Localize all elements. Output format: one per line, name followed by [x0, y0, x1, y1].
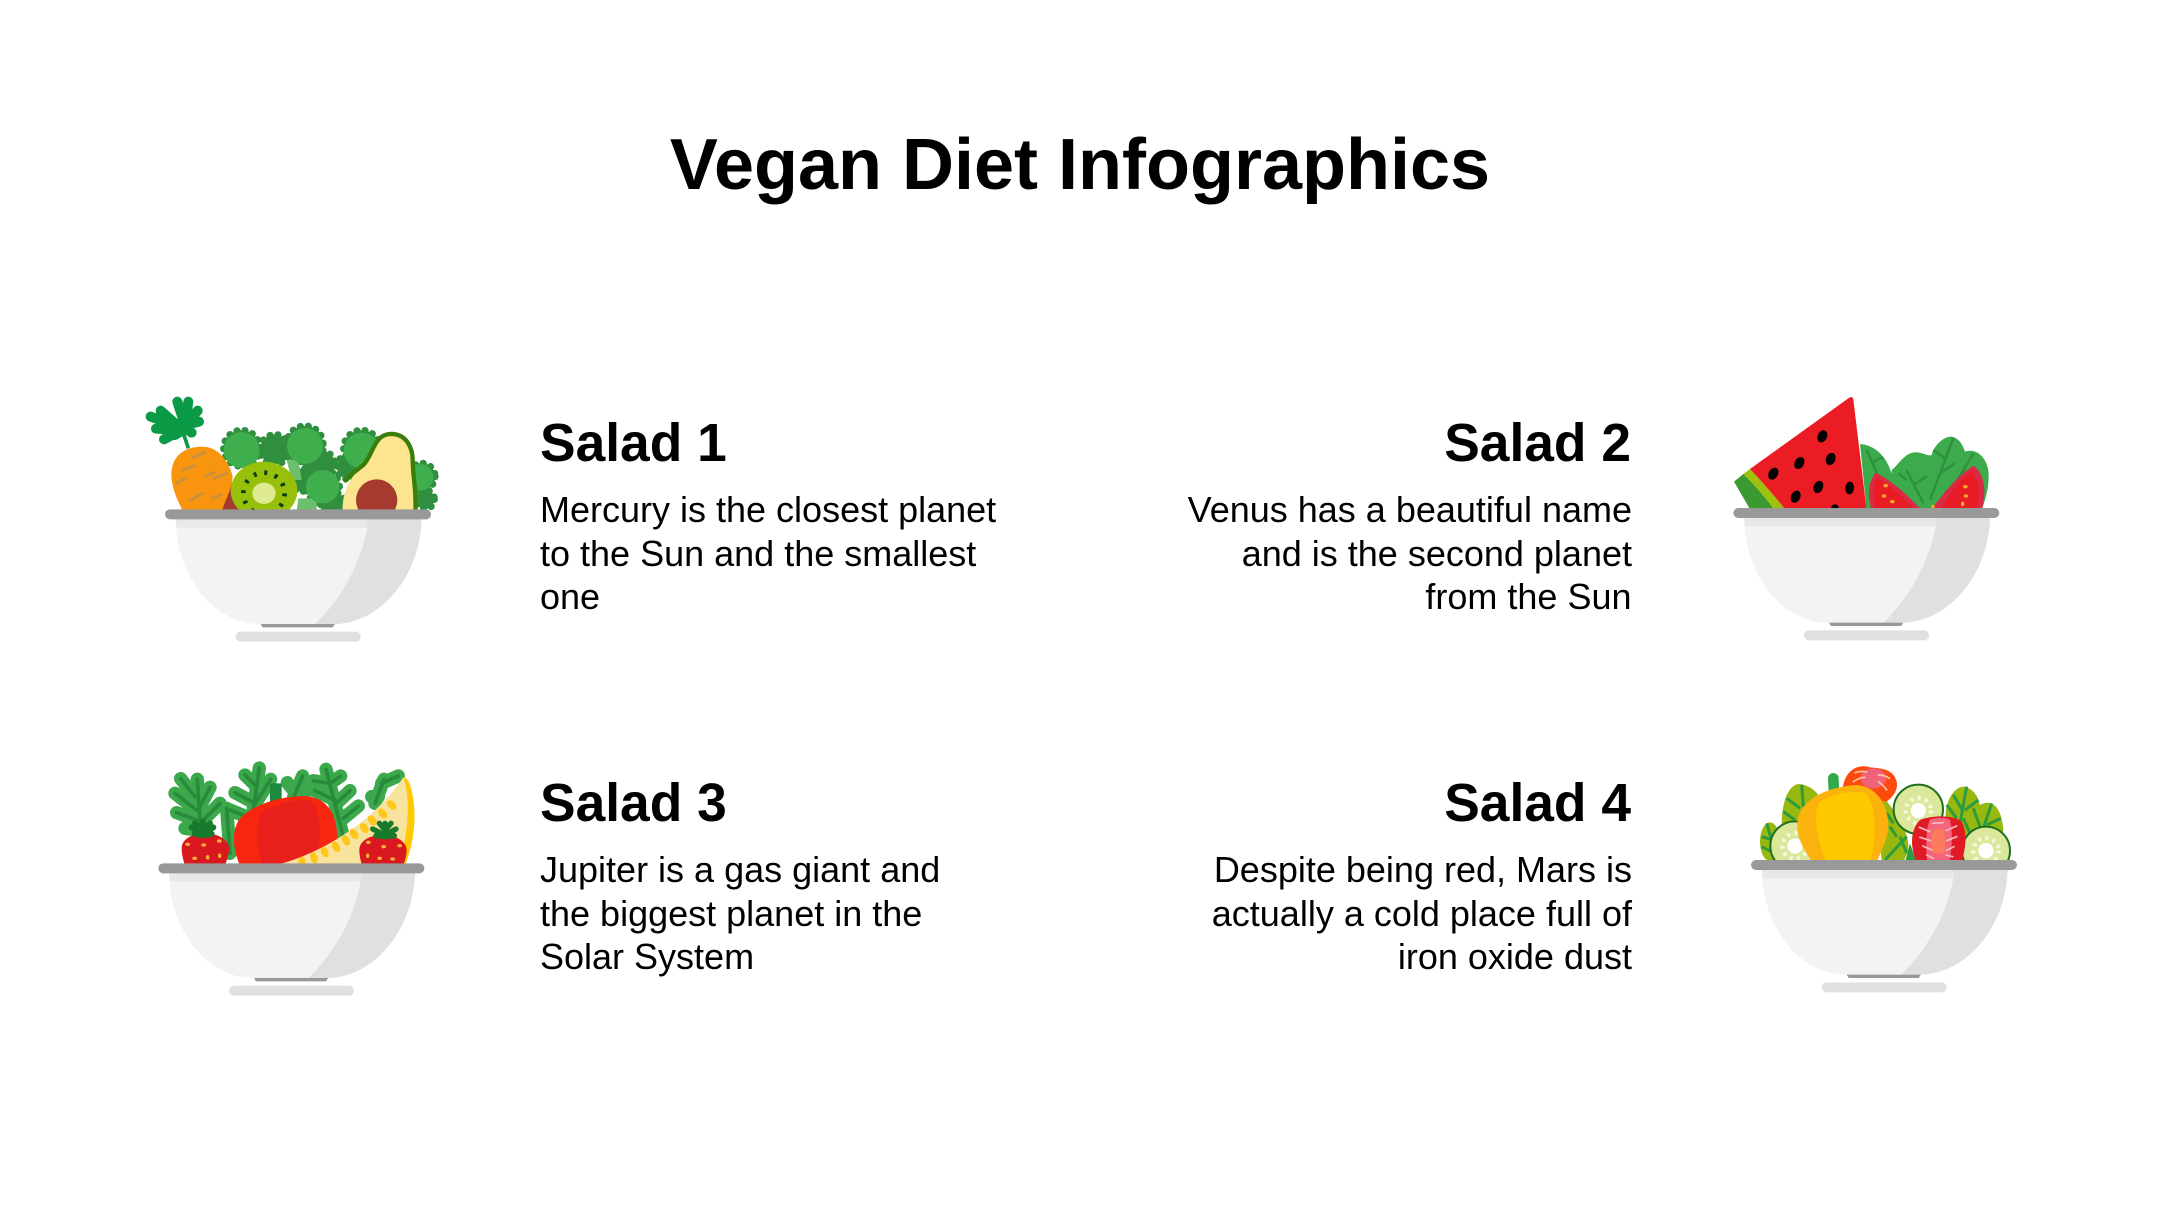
icon: salad 2 watermelon and tomato [1734, 397, 1989, 510]
panel: salad 1 illustration [151, 402, 435, 642]
description: one [540, 576, 600, 617]
icon: bowl [1733, 508, 1999, 640]
icon: salad 1 vegetables [151, 402, 435, 521]
description: Venus has a beautiful name [1188, 489, 1632, 530]
icon: bowl [158, 863, 424, 996]
description: to the Sun and the smallest [540, 533, 976, 574]
icon: bowl [165, 509, 431, 642]
description: iron oxide dust [1398, 936, 1632, 977]
panel: salad 4 illustration [1751, 766, 2017, 992]
description: and is the second planet [1242, 533, 1632, 574]
description: the biggest planet in the [540, 893, 922, 934]
text block: salad 1 [540, 414, 996, 617]
panel: salad 3 illustration [158, 768, 424, 996]
icon: salad 3 pepper, melon and strawberries [175, 768, 415, 867]
title: Vegan Diet Infographics [670, 125, 1490, 205]
text block: salad 3 [540, 774, 940, 977]
text block: salad 4 [1212, 774, 1633, 977]
heading: Salad 1 [540, 414, 727, 473]
text block: salad 2 [1188, 414, 1632, 617]
description: Despite being red, Mars is [1214, 849, 1632, 890]
description: Jupiter is a gas giant and [540, 849, 940, 890]
description: Solar System [540, 936, 754, 977]
description: from the Sun [1425, 576, 1632, 617]
heading: Salad 2 [1444, 414, 1631, 473]
heading: Salad 3 [540, 774, 727, 833]
description: Mercury is the closest planet [540, 489, 996, 530]
heading: Salad 4 [1444, 774, 1631, 833]
icon: bowl [1751, 860, 2017, 992]
description: actually a cold place full of [1212, 893, 1633, 934]
panel: salad 2 illustration [1733, 397, 1999, 640]
icon: salad 4 peppers, cucumber and strawberry [1760, 766, 2011, 860]
